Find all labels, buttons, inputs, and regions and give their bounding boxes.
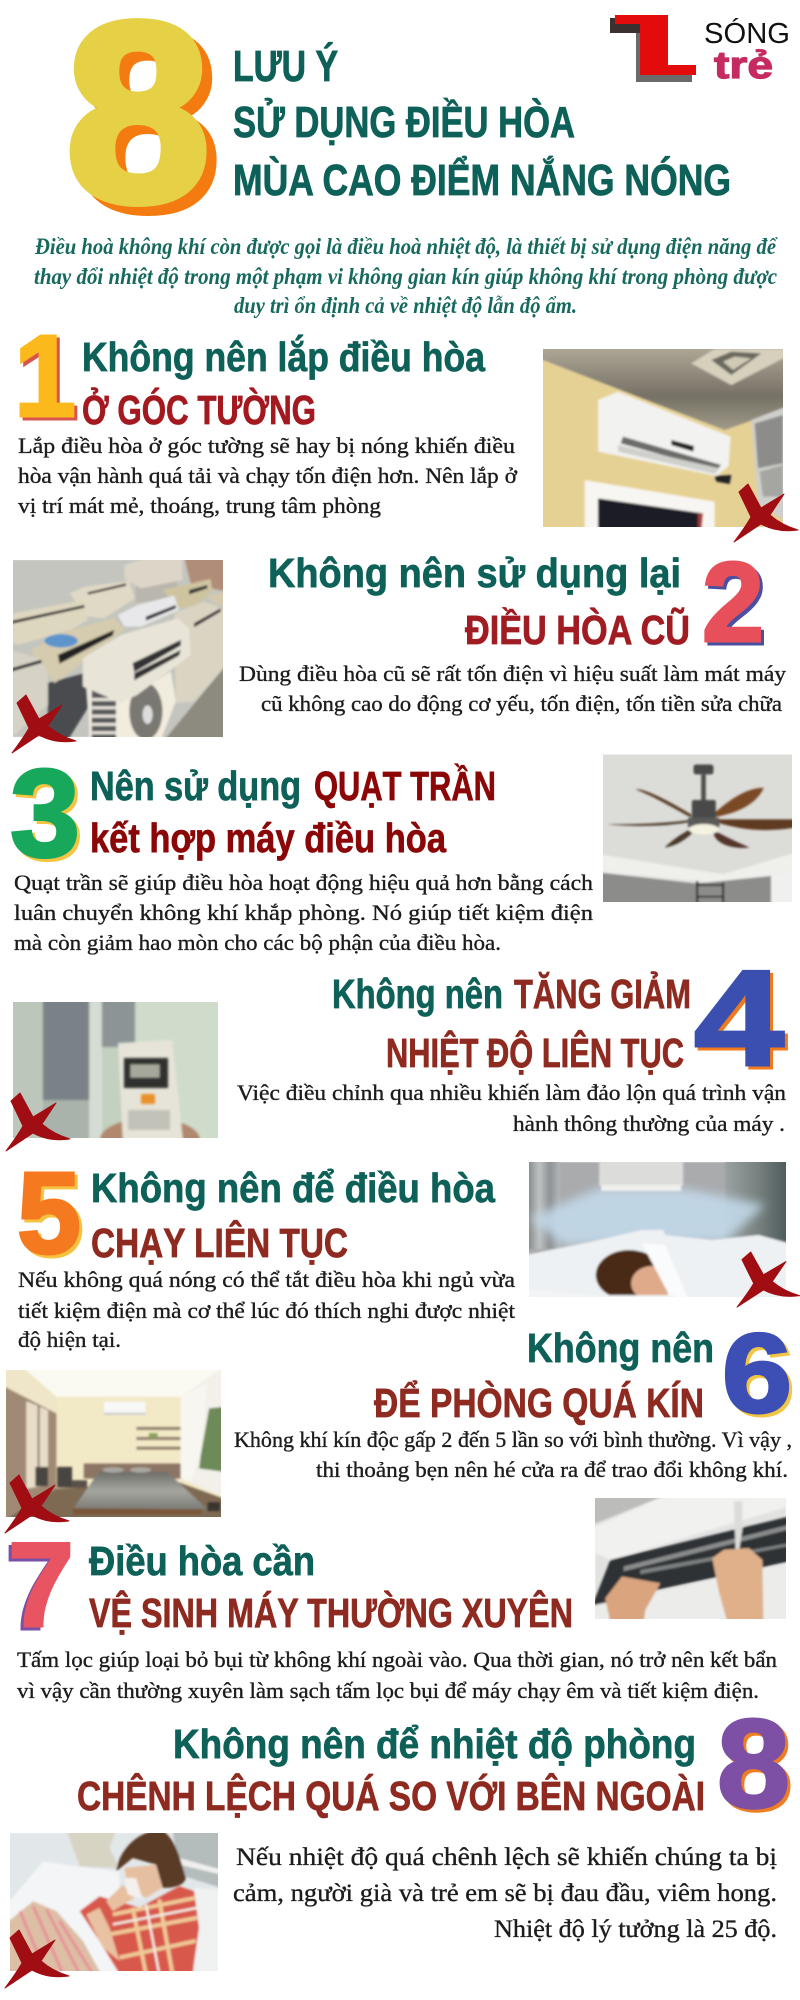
photo: remote control in hand <box>13 1002 218 1138</box>
body text 8: Nếu nhiệt độ quá chênh lệch sẽ khiến chúng ta bị <box>236 1844 777 1871</box>
logo <box>610 15 790 87</box>
heading 6 <box>374 1325 714 1426</box>
body text 5 <box>18 1267 515 1352</box>
body text 2: Dùng điều hòa cũ sẽ rất tốn điện vì hiệu suất làm mát máy <box>239 661 786 686</box>
number 8: 8 <box>720 1696 793 1837</box>
number 2: 2 <box>702 539 764 665</box>
panel: tip 6 <box>3 1311 795 1533</box>
icon: red cross <box>12 695 76 753</box>
panel: tip 5 <box>17 1148 800 1352</box>
heading 6: Không nên <box>527 1325 714 1371</box>
heading 3: Nên sử dụng <box>90 763 301 809</box>
heading 7: VỆ SINH MÁY THƯỜNG XUYÊN <box>89 1590 573 1636</box>
icon: red cross <box>737 1252 800 1307</box>
icon: red cross <box>734 484 798 542</box>
body text 5: Nếu không quá nóng có thể tắt điều hòa khi ngủ vừa <box>18 1267 515 1292</box>
heading 7: Điều hòa cần <box>89 1538 315 1584</box>
panel: tip 1 <box>14 311 798 542</box>
photo: wall air conditioner near corner <box>543 349 783 527</box>
number 6: 6 <box>722 1311 792 1436</box>
title <box>233 41 731 205</box>
heading 2: Không nên sử dụng lại <box>268 550 681 596</box>
icon: red cross <box>5 1930 69 1988</box>
title: LƯU Ý <box>233 41 338 91</box>
body text 5: độ hiện tại. <box>18 1327 121 1352</box>
body text 5: tiết kiệm điện mà cơ thể lúc đó thích nghi được nhiệt <box>18 1298 515 1323</box>
heading 5: CHẠY LIÊN TỤC <box>91 1220 348 1266</box>
body text 4: hành thông thường của máy . <box>513 1111 785 1136</box>
photo: woman with a cold <box>10 1833 218 1971</box>
icon: red cross <box>6 1093 70 1151</box>
body text 6 <box>234 1427 792 1482</box>
photo: hands cleaning filter <box>595 1498 786 1619</box>
photo: bedroom <box>6 1370 221 1517</box>
heading 3: QUẠT TRẦN <box>314 763 496 809</box>
body text 8 <box>233 1844 777 1943</box>
body text 7: Tấm lọc giúp loại bỏ bụi từ không khí ngoài vào. Qua thời gian, nó trở nên kết bẩn <box>17 1647 777 1672</box>
heading 1: Ở GÓC TƯỜNG <box>82 387 316 433</box>
heading 4: Không nên <box>332 971 503 1017</box>
number 5: 5 <box>17 1148 81 1278</box>
body text 6: thi thoảng bẹn nên hé cửa ra để trao đổi không khí. <box>316 1457 788 1482</box>
body text 2: cũ không cao do động cơ yếu, tốn điện, tốn tiền sửa chữa <box>261 691 782 716</box>
number 4: 4 <box>694 942 784 1094</box>
logo: trẻ <box>714 45 773 87</box>
body text 1 <box>18 433 517 518</box>
photo: child sleeping under air conditioner <box>529 1162 786 1297</box>
heading 3 <box>90 763 496 861</box>
body text 8: Nhiệt độ lý tưởng là 25 độ. <box>494 1916 777 1943</box>
number 1: 1 <box>17 314 79 444</box>
title: SỬ DỤNG ĐIỀU HÒA <box>233 96 575 147</box>
intro paragraph: duy trì ổn định cả về nhiệt độ lẫn độ ẩm. <box>234 293 577 319</box>
heading 7 <box>89 1538 573 1636</box>
panel: tip 2 <box>10 539 786 753</box>
body text 3 <box>14 870 593 955</box>
panel: tip 3 <box>10 745 795 955</box>
photo: used air conditioners <box>13 560 223 737</box>
heading 2 <box>268 550 690 653</box>
heading 4 <box>332 971 691 1076</box>
body text 1: Lắp điều hòa ở góc tường sẽ hay bị nóng khiến điều <box>18 433 515 458</box>
body text 4 <box>237 1080 786 1136</box>
panel: tip 4 <box>3 942 787 1162</box>
heading 1: Không nên lắp điều hòa <box>82 334 486 380</box>
number 2: 2 <box>705 542 767 668</box>
heading 3: kết hợp máy điều hòa <box>90 815 447 861</box>
header <box>34 0 790 319</box>
heading 6: ĐỂ PHÒNG QUÁ KÍN <box>374 1379 704 1426</box>
number 6: 6 <box>725 1314 795 1439</box>
photo: ceiling fan <box>603 754 792 902</box>
heading 4: NHIỆT ĐỘ LIÊN TỤC <box>386 1030 684 1076</box>
number 7: 7 <box>5 1521 71 1655</box>
heading 2: ĐIỀU HÒA CŨ <box>465 607 690 653</box>
heading 5 <box>91 1165 496 1266</box>
number 7: 7 <box>8 1518 74 1652</box>
panel: tip 7 <box>5 1495 789 1703</box>
logo: SÓNG <box>704 17 790 50</box>
number 5: 5 <box>20 1151 84 1281</box>
icon: red cross <box>5 1475 69 1533</box>
body text 2 <box>239 661 786 716</box>
number 3: 3 <box>10 745 80 883</box>
number 3: 3 <box>13 748 83 886</box>
body text 3: Quạt trần sẽ giúp điều hòa hoạt động hiệu quả hơn bằng cách <box>14 870 593 895</box>
body text 1: hòa vận hành quá tải và chạy tốn điện hơn. Nên lắp ở <box>18 463 517 488</box>
number 8: 8 <box>717 1693 790 1834</box>
body text 3: luân chuyển không khí khắp phòng. Nó giúp tiết kiệm điện <box>14 900 593 925</box>
body text 4: Việc điều chỉnh qua nhiều khiến làm đảo lộn quá trình vận <box>237 1080 786 1105</box>
heading 4: TĂNG GIẢM <box>514 971 691 1017</box>
panel: tip 8 <box>5 1693 793 1988</box>
body text 8: cảm, người già và trẻ em sẽ bị đau đầu, viêm hong. <box>233 1880 777 1907</box>
body text 7: vì vậy cần thường xuyên làm sạch tấm lọc bụi để máy chạy êm và tiết kiệm điện. <box>17 1678 759 1703</box>
body text 6: Không khí kín độc gấp 2 đến 5 lần so với bình thường. Vì vậy , <box>234 1427 792 1452</box>
body text 7 <box>17 1647 777 1703</box>
body text 3: mà còn giảm hao mòn cho các bộ phận của điều hòa. <box>14 930 501 955</box>
heading 1 <box>82 334 486 433</box>
intro paragraph <box>34 234 778 319</box>
number 1: 1 <box>14 311 76 441</box>
heading 8 <box>77 1721 705 1819</box>
body text 1: vị trí mát mẻ, thoáng, trung tâm phòng <box>18 493 381 518</box>
heading 8: Không nên để nhiệt độ phòng <box>173 1721 696 1767</box>
number 4: 4 <box>697 945 787 1097</box>
heading 5: Không nên để điều hòa <box>91 1165 496 1211</box>
